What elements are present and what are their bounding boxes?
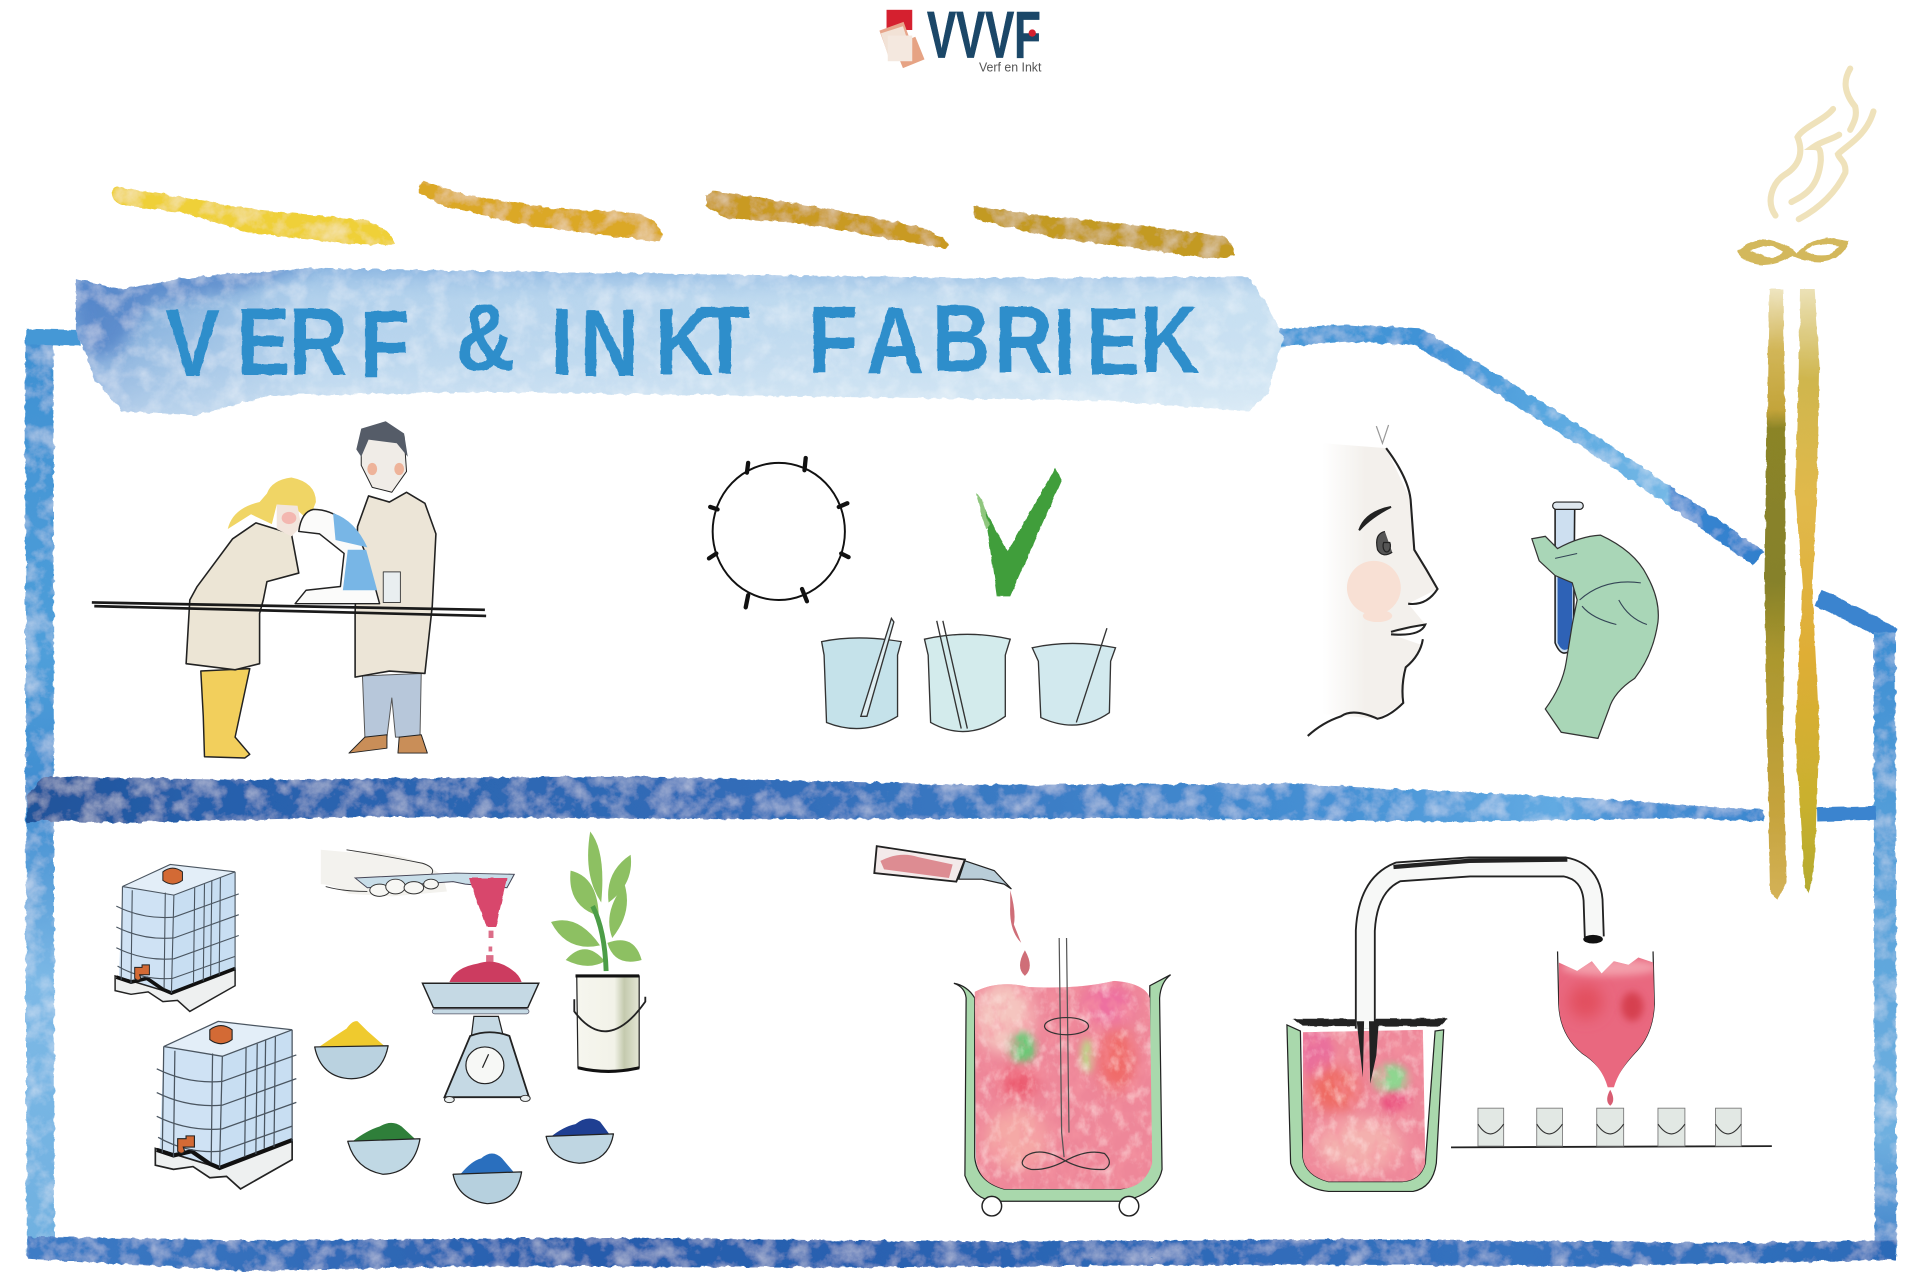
left wall — [39, 338, 40, 1255]
pigment pile — [449, 962, 522, 982]
hand with spoon — [321, 850, 514, 962]
dip legs — [1357, 1021, 1379, 1084]
drop — [1607, 1090, 1613, 1106]
filling line with cups — [1451, 1108, 1772, 1147]
blue factory frame — [26, 333, 1896, 1271]
woman cheek — [282, 512, 296, 524]
pouring bottle — [874, 846, 1030, 976]
stroke 3 — [707, 191, 949, 249]
weighing scale — [422, 962, 539, 1103]
paint — [1302, 1030, 1426, 1182]
woman legs — [201, 669, 250, 758]
right wall — [1884, 632, 1886, 1255]
pigment crumbs — [486, 931, 493, 962]
green check mark — [976, 468, 1062, 596]
beaker 1 — [822, 618, 901, 729]
spoon — [355, 873, 514, 888]
man cheeks — [367, 463, 404, 475]
middle floor band — [27, 776, 1763, 823]
cup handles — [1478, 1124, 1741, 1134]
profile line — [1308, 448, 1438, 736]
eyebrow — [1359, 507, 1391, 530]
paint stream — [1010, 890, 1025, 950]
logo: VVVF Verf en Inkt: VVVF — [927, 0, 1041, 73]
paint drop — [1020, 950, 1030, 976]
smoke ring — [1738, 238, 1849, 265]
glove — [1532, 535, 1658, 738]
microscope — [295, 509, 380, 604]
microscope blue arm — [333, 513, 367, 547]
bottle body — [874, 846, 965, 882]
leaves — [551, 831, 642, 966]
finger lines — [1555, 553, 1647, 624]
feet — [444, 1095, 530, 1103]
falling pigment — [469, 878, 507, 927]
tank shell — [954, 975, 1171, 1201]
woman face — [277, 504, 301, 536]
title text — [165, 284, 1199, 398]
raw material tanks — [115, 864, 296, 1189]
yellow roof strokes — [111, 181, 1236, 258]
hand outline — [326, 850, 433, 891]
connector right of chimney — [1817, 813, 1876, 814]
title text: FABRIEK — [808, 285, 1199, 395]
fingers — [370, 879, 438, 896]
lid — [1293, 1019, 1447, 1026]
smoke wisps — [1771, 69, 1873, 219]
bucket — [577, 976, 639, 1071]
bottom floor band — [27, 1237, 1896, 1271]
hair tuft — [1376, 425, 1389, 443]
stroke 1 — [111, 187, 396, 245]
woman hair — [228, 478, 316, 529]
stirrer paddle — [1022, 1152, 1109, 1170]
conveyor line — [1451, 1146, 1772, 1147]
paint — [974, 980, 1152, 1189]
left chimney pipe — [1764, 289, 1787, 900]
pipe — [1365, 860, 1594, 1029]
man coat — [355, 492, 436, 677]
pigment bowls — [315, 1021, 613, 1204]
cups — [1478, 1108, 1741, 1146]
body — [444, 1032, 529, 1097]
woman coat — [186, 523, 299, 670]
stroke 2 — [419, 181, 664, 241]
man trousers — [362, 673, 421, 737]
man hair — [356, 421, 408, 457]
paint funnel — [1555, 951, 1659, 1106]
skin — [1322, 443, 1438, 719]
stroke 4 — [973, 206, 1236, 258]
rotation arrow — [1044, 1018, 1089, 1035]
microscope blue base — [343, 550, 377, 590]
tank 2 — [155, 1021, 296, 1189]
wheels — [982, 1196, 1139, 1216]
person smelling: face — [1308, 425, 1438, 736]
lab bench — [92, 602, 486, 616]
logo: VVVF Verf en Inkt: Verf en Inkt — [979, 60, 1042, 75]
bottle neck — [959, 861, 1011, 889]
dial — [466, 1047, 504, 1084]
test beakers — [822, 618, 1116, 732]
green bowl — [348, 1123, 420, 1174]
navy bowl — [546, 1118, 613, 1163]
scientists at microscope — [92, 421, 486, 758]
sloped roof — [1278, 333, 1758, 558]
inspection ring — [709, 458, 849, 607]
glass in hand — [383, 572, 400, 602]
beaker 2 — [924, 621, 1010, 732]
top left connector — [26, 337, 81, 338]
cheek — [1347, 561, 1401, 622]
mixing tank — [954, 938, 1171, 1216]
hand — [321, 850, 447, 896]
blue bowl — [453, 1153, 522, 1204]
banner wash — [71, 263, 1283, 415]
potted plant — [551, 831, 645, 1071]
man head — [361, 436, 407, 492]
tank shell — [1287, 1025, 1444, 1191]
filling tank with pipe — [1287, 860, 1603, 1191]
roof segment right of chimney — [1818, 598, 1893, 637]
stirrer shaft — [1059, 938, 1069, 1157]
eye — [1377, 531, 1392, 555]
title text: & — [456, 284, 515, 390]
right chimney pipe — [1795, 289, 1820, 894]
title text: INKT — [551, 286, 750, 396]
handle — [574, 997, 645, 1031]
bowl — [422, 983, 539, 1008]
tank 1 — [115, 864, 239, 1011]
gloved hand with test tube — [1532, 502, 1658, 738]
stem — [593, 906, 606, 971]
title banner — [71, 263, 1283, 415]
man shoes — [349, 735, 427, 753]
nozzle — [1583, 935, 1603, 943]
test tube — [1555, 508, 1575, 653]
neck — [471, 1016, 503, 1036]
title text: VERF — [165, 289, 410, 398]
logo: VVVF Verf en Inkt — [879, 0, 1042, 75]
chimney — [1764, 289, 1820, 900]
yellow bowl — [315, 1021, 388, 1079]
beaker 3 — [1032, 628, 1116, 725]
